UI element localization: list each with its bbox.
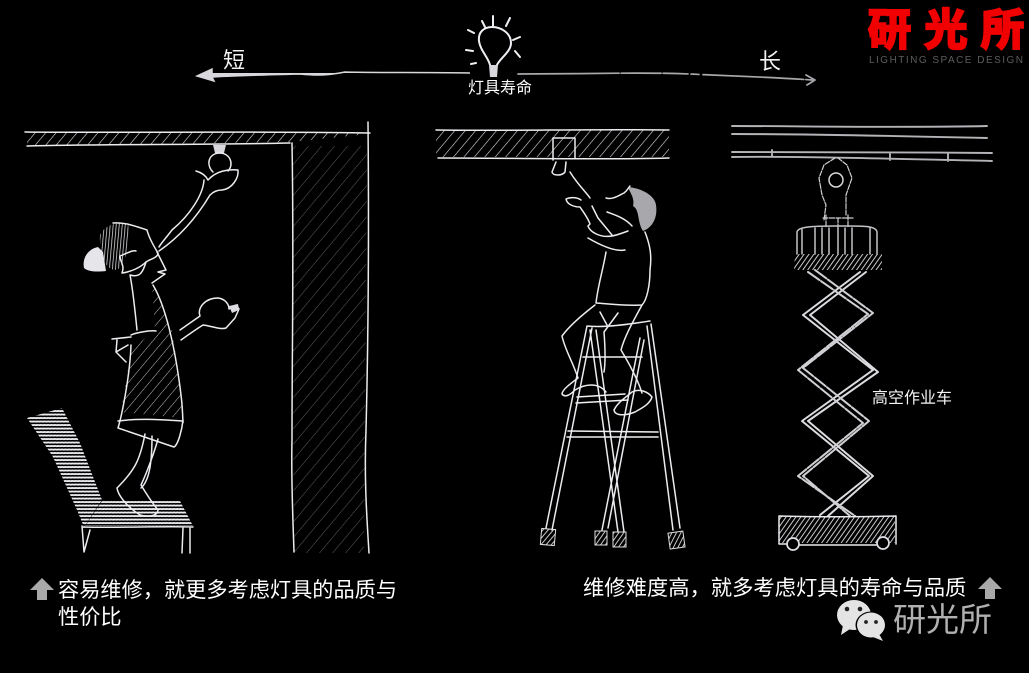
label: short: 短	[223, 48, 245, 73]
stepladder	[540, 321, 685, 549]
chair	[27, 408, 193, 553]
worker	[819, 158, 853, 228]
lifespan axis	[197, 16, 815, 97]
base with wheels	[779, 516, 896, 550]
panel: scissor lift	[732, 126, 992, 550]
icon: WeChat bubbles	[837, 600, 886, 641]
watermark: WeChat 研光所: 研光所	[893, 601, 992, 638]
arrow: short lifespan	[197, 69, 470, 81]
caption: left	[30, 578, 397, 629]
watermark: WeChat 研光所	[837, 600, 992, 641]
basket	[794, 226, 882, 270]
raised arm and hand	[159, 170, 238, 251]
scissor arms	[798, 270, 878, 516]
caption: left: 容易维修，就更多考虑灯具的品质与	[58, 578, 397, 602]
icon: up arrow right	[978, 577, 1002, 599]
man	[552, 162, 656, 415]
legs and feet	[117, 434, 158, 516]
bulb in ceiling	[209, 145, 231, 172]
panel: man on stepladder, harder maintenance	[436, 130, 685, 549]
icon: light bulb	[466, 16, 520, 77]
ceiling	[436, 130, 669, 160]
dress and body	[112, 252, 183, 447]
logo: 研光所 Lighting Space Design: LIGHTING SPACE DESIGN	[869, 55, 1023, 66]
label: long: 长	[759, 49, 781, 74]
logo: 研光所 Lighting Space Design: 研光所	[868, 7, 1024, 55]
icon: up arrow left	[30, 578, 54, 600]
head and hair	[84, 223, 158, 273]
ceiling beams	[732, 126, 992, 161]
panel: woman on chair, easy maintenance	[25, 122, 370, 553]
label: lamp lifespan: 灯具寿命	[468, 79, 532, 97]
caption: left: 性价比	[58, 605, 122, 629]
arrow: long lifespan	[518, 73, 815, 85]
caption: right: 维修难度高，就多考虑灯具的寿命与品质	[583, 576, 966, 600]
holding hand with spare bulb	[180, 298, 239, 340]
ceiling and wall	[25, 122, 370, 553]
label: aerial work vehicle: 高空作业车	[872, 389, 952, 407]
